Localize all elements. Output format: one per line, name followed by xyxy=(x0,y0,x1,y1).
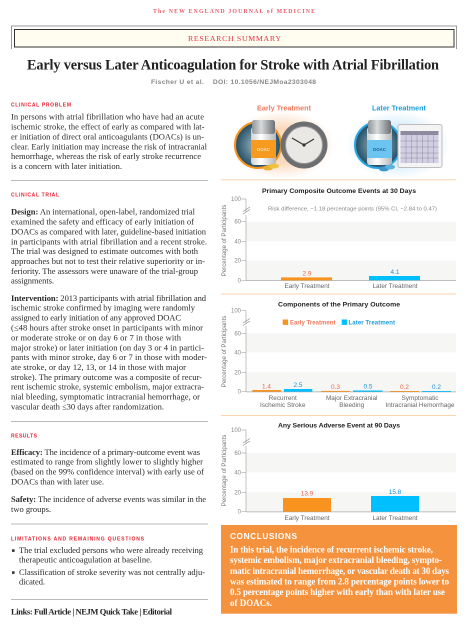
intervention text: ate stroke, or day 12, 13, or 14 in those with major xyxy=(11,362,186,372)
chart: components of the primary outcome: Major Extracranial xyxy=(326,395,377,402)
chart: primary composite outcome: 20 xyxy=(234,259,242,265)
panel: clinical problem xyxy=(11,103,208,171)
chart: components of the primary outcome: 100 xyxy=(231,309,242,315)
design text xyxy=(11,206,207,286)
chart: components of the primary outcome: Symptomatic xyxy=(402,395,439,402)
chart: primary composite outcome: 2.9 xyxy=(303,270,312,278)
design text: in participants with atrial fibrillation and a recent stroke. xyxy=(11,236,207,246)
chart: components of the primary outcome: 0.5 xyxy=(364,384,373,390)
research summary banner xyxy=(12,26,456,49)
chart: components of the primary outcome: Bleeding xyxy=(339,402,365,409)
chart: primary composite outcome: Primary Composite Outcome Events at 30 Days xyxy=(262,188,416,195)
panel: limitations: Classification of stroke severity was not centrally adju- xyxy=(19,567,205,577)
panel: clinical problem: ischemic stroke, the effect of early as compared with lat- xyxy=(11,121,205,131)
intervention text: major stroke) or later initiation (on day 3 or 4 in partici- xyxy=(11,342,204,352)
legend xyxy=(283,320,395,326)
panel: limitations: The trial excluded persons who were already receiving xyxy=(19,545,204,555)
chart: serious adverse event: 40 xyxy=(234,470,242,476)
legend: Later Treatment xyxy=(348,320,395,326)
panel: conclusions: systemic embolism, major extracranial bleeding, sympto- xyxy=(230,555,442,565)
safety text xyxy=(11,494,206,514)
design text: approaches but not to test their relative superiority or in- xyxy=(11,256,205,266)
panel: results xyxy=(11,433,206,514)
intervention text: assigned to early initiation of any approved DOAC xyxy=(11,313,181,323)
design text: The trial was designed to estimate outcomes with both xyxy=(11,246,199,256)
panel: clinical trial xyxy=(11,193,207,412)
chart: primary composite outcome: 4.1 xyxy=(391,269,400,276)
early treatment label: Early Treatment xyxy=(257,103,312,112)
chart: components of the primary outcome xyxy=(221,302,456,409)
panel: conclusions: was estimated to range from 2.8 percentage points lower to xyxy=(230,576,450,586)
panel: conclusions: matic intracranial hemorrhage, or vascular death at 30 days xyxy=(230,566,450,576)
efficacy text: estimated to range from slightly lower to slightly higher xyxy=(11,457,203,467)
later treatment label: N=1007 xyxy=(389,114,409,120)
chart: serious adverse event: Later Treatment xyxy=(372,515,418,522)
early treatment label: N=1006 xyxy=(274,114,294,120)
chart: components of the primary outcome: 0 xyxy=(238,390,242,396)
chart: serious adverse event: 15.8 xyxy=(389,489,402,496)
authors and DOI: Fischer U et al. DOI: 10.1056/NEJMoa2303048 xyxy=(151,79,316,86)
intervention text: or moderate stroke or on day 6 or 7 in those with xyxy=(11,332,182,342)
chart: components of the primary outcome: Intracranial Hemorrhage xyxy=(386,402,455,409)
panel: clinical problem: is a concern with later initiation. xyxy=(11,161,122,171)
chart: serious adverse event: 100 xyxy=(231,428,242,434)
intervention text: nial bleeding, symptomatic intracranial hemorrhage, or xyxy=(11,392,200,402)
chart: components of the primary outcome: 1.4 xyxy=(262,384,271,390)
panel: limitations: therapeutic anticoagulation at baseline. xyxy=(19,555,152,565)
design text: feriority. The assessors were unaware of the trial-group xyxy=(11,266,198,276)
panel: clinical problem: clear. Early initiation may increase the risk of intracranial xyxy=(11,141,208,151)
panel: conclusions: 0.5 percentage points higher with early than with later use xyxy=(230,587,445,597)
panel: clinical trial: CLINICAL TRIAL xyxy=(11,193,59,199)
chart: components of the primary outcome: Recurrent xyxy=(269,395,297,402)
design text: assignments. xyxy=(11,276,54,286)
efficacy text: DOACs than with later use. xyxy=(11,477,104,487)
design text: Design: An international, open-label, randomized trial xyxy=(11,206,196,216)
efficacy text: Efficacy: The incidence of a primary-outcome event was xyxy=(11,447,200,457)
chart: components of the primary outcome: 60 xyxy=(234,331,242,337)
intervention text: (≤48 hours after stroke onset in participants with minor xyxy=(11,322,203,332)
panel: limitations: LIMITATIONS AND REMAINING QUESTIONS xyxy=(11,536,145,542)
chart: serious adverse event: 0 xyxy=(238,510,242,516)
intervention text: ischemic stroke confirmed by imaging were randomly xyxy=(11,303,196,313)
chart: serious adverse event: Early Treatment xyxy=(284,515,330,522)
panel: clinical problem: er initiation of direct oral anticoagulants (DOACs) is un- xyxy=(11,131,204,141)
chart: primary composite outcome: 100 xyxy=(231,197,242,203)
panel: clinical problem: hemorrhage, whereas the risk of early stroke recurrence xyxy=(11,151,201,161)
icon: early treatment bottle and clock xyxy=(230,111,334,179)
chart: components of the primary outcome: Components of the Primary Outcome xyxy=(278,302,400,308)
chart: primary composite outcome: 60 xyxy=(234,220,242,226)
chart: primary composite outcome: 40 xyxy=(234,239,242,245)
links: Links: Full Article | NEJM Quick Take | Editorial xyxy=(11,606,173,616)
chart: serious adverse event: 60 xyxy=(234,451,242,457)
chart: components of the primary outcome: Percentage of Participants xyxy=(221,316,228,387)
panel: clinical problem: In persons with atrial fibrillation who have had an acute xyxy=(11,112,204,122)
chart: serious adverse event: 20 xyxy=(234,490,242,496)
chart: components of the primary outcome: Ischemic Stroke xyxy=(260,402,306,409)
panel: clinical problem: CLINICAL PROBLEM xyxy=(11,103,71,109)
journal masthead: The NEW ENGLAND JOURNAL of MEDICINE xyxy=(153,9,315,15)
early treatment label xyxy=(257,103,312,120)
chart: primary composite outcome: Risk difference, −1.18 percentage points (95% CI, −2.84 to 0.47) xyxy=(268,206,437,212)
intervention text: Intervention: 2013 participants with atrial fibrillation and xyxy=(11,293,207,303)
intervention text xyxy=(11,293,207,412)
chart: primary composite outcome: Percentage of Participants xyxy=(221,205,228,276)
intervention text: vascular death ≤30 days after randomization. xyxy=(11,402,164,412)
panel: conclusions: CONCLUSIONS xyxy=(230,531,297,541)
chart: primary composite outcome: 0 xyxy=(238,278,242,284)
panel: limitations: dicated. xyxy=(19,577,45,587)
chart: primary composite outcome: Later Treatment xyxy=(372,283,418,290)
safety text: Safety: The incidence of adverse events was similar in the xyxy=(11,494,206,504)
chart: components of the primary outcome: 20 xyxy=(234,370,242,376)
research summary banner: RESEARCH SUMMARY xyxy=(188,34,281,43)
panel: conclusions: of DOACs. xyxy=(230,598,272,608)
efficacy text xyxy=(11,447,204,487)
intervention text: stroke). The primary outcome was a composite of recur- xyxy=(11,372,202,382)
chart: components of the primary outcome: 0.3 xyxy=(331,384,340,391)
chart: components of the primary outcome: 40 xyxy=(234,350,242,356)
panel: conclusions: In this trial, the incidence of recurrent ischemic stroke, xyxy=(230,544,433,554)
later treatment label: Later Treatment xyxy=(372,103,427,112)
title: Early versus Later Anticoagulation for Stroke with Atrial Fibrillation xyxy=(27,58,439,74)
intervention text: pants with minor stroke, day 6 or 7 in those with moder- xyxy=(11,352,207,362)
chart: serious adverse event: Percentage of Participants xyxy=(221,435,228,506)
panel: results: RESULTS xyxy=(11,433,38,439)
icon: early treatment bottle and clock: DOAC xyxy=(257,147,271,152)
design text: examined the safety and efficacy of early initiation of xyxy=(11,216,194,226)
safety text: two groups. xyxy=(11,504,51,514)
icon: later treatment bottle and calendar xyxy=(346,111,450,179)
efficacy text: (based on the 99% confidence interval) with early use of xyxy=(11,467,204,477)
chart: primary composite outcome xyxy=(221,188,456,290)
chart: components of the primary outcome: 2.5 xyxy=(294,382,303,389)
chart: serious adverse event: 13.9 xyxy=(301,490,314,498)
chart: components of the primary outcome: 0.2 xyxy=(432,384,441,391)
chart: serious adverse event: Any Serious Adverse Event at 90 Days xyxy=(278,422,400,430)
chart: serious adverse event xyxy=(221,422,456,522)
later treatment label xyxy=(372,103,427,120)
panel: limitations xyxy=(11,536,205,587)
legend: Early Treatment xyxy=(290,320,336,326)
panel: conclusions xyxy=(221,525,457,614)
chart: primary composite outcome: Early Treatment xyxy=(284,283,330,290)
icon: later treatment bottle and calendar: DOAC xyxy=(373,147,387,152)
chart: components of the primary outcome: 0.2 xyxy=(400,384,409,391)
design text: DOACs as compared with later, guideline-based initiation xyxy=(11,226,207,236)
intervention text: rent ischemic stroke, systemic embolism, major extracra- xyxy=(11,382,204,392)
